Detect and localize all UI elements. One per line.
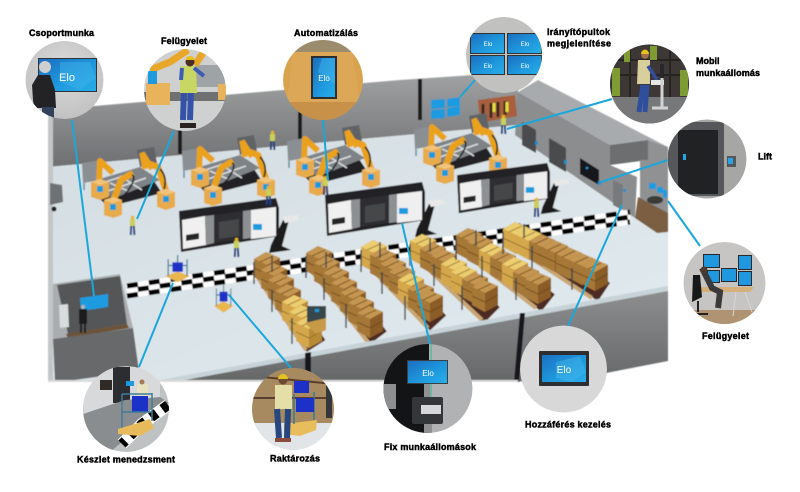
left wall <box>48 110 53 382</box>
checkerboard lane <box>127 212 630 296</box>
label: Irányítópultok megjelenítése: megjelenítése <box>547 38 611 48</box>
corner meeting room <box>53 274 139 382</box>
connector lines <box>72 80 700 368</box>
callout: Felügyelet (desk) <box>683 242 767 324</box>
callout: Fix munkaállomások <box>383 344 472 434</box>
partial robot fixture at left edge <box>50 183 63 212</box>
callout: Felügyelet <box>144 49 226 131</box>
label: Készlet menedzsment: Készlet menedzsment <box>77 454 175 464</box>
factory workers <box>130 115 539 257</box>
label: Mobil munkaállomás: munkaállomás <box>696 68 760 78</box>
label: Fix munkaállomások: Fix munkaállomások <box>384 442 477 452</box>
callout: Csoportmunka <box>26 41 104 119</box>
structural pillars <box>180 79 420 154</box>
right wall block <box>515 80 668 233</box>
callout: Hozzáférés kezelés: Elo <box>557 365 572 376</box>
label: Mobil munkaállomás: Mobil <box>696 56 720 66</box>
floor <box>48 125 668 382</box>
callout: Irányítópultok megjelenítése: Elo <box>521 64 530 70</box>
callout: Automatizálás: Elo <box>318 74 330 83</box>
label: Felügyelet: Felügyelet <box>161 36 207 46</box>
label: Automatizálás: Automatizálás <box>294 28 358 38</box>
callout: Lift <box>668 120 746 198</box>
callout: Csoportmunka: Elo <box>59 72 75 84</box>
factory floor plan <box>48 72 668 382</box>
callout: Irányítópultok megjelenítése: Elo <box>521 42 530 48</box>
callout: Hozzáférés kezelés <box>520 326 607 412</box>
label: Irányítópultok megjelenítése: Irányítópultok <box>547 27 611 37</box>
robot cells <box>82 113 507 218</box>
front wall <box>48 286 668 382</box>
label: Csoportmunka: Csoportmunka <box>29 28 95 38</box>
callout: Irányítópultok megjelenítése: Elo <box>484 42 493 48</box>
label: Hozzáférés kezelés: Hozzáférés kezelés <box>525 420 611 430</box>
label: Felügyelet right: Felügyelet <box>702 331 749 341</box>
monitors in back room <box>647 183 667 204</box>
callout: Irányítópultok megjelenítése: Elo <box>484 64 493 70</box>
callout: Készlet menedzsment <box>83 366 169 452</box>
CNC machines <box>179 163 569 253</box>
callout: Fix munkaállomások: Elo <box>422 369 434 378</box>
AGV parked near racks <box>305 306 326 334</box>
doors <box>522 122 626 210</box>
back wall <box>48 72 518 167</box>
callout: Automatizálás <box>283 40 363 120</box>
callout: Irányítópultok megjelenítése <box>466 17 542 93</box>
label: Lift: Lift <box>758 152 772 162</box>
label: Raktározás: Raktározás <box>270 454 320 464</box>
warehouse racks <box>254 222 608 350</box>
storage shelf <box>478 95 517 123</box>
automated carts <box>165 255 233 313</box>
callout: Raktározás <box>252 368 334 450</box>
dashboard monitors on back wall <box>431 97 460 119</box>
callout: Mobil munkaállomás <box>610 44 690 125</box>
